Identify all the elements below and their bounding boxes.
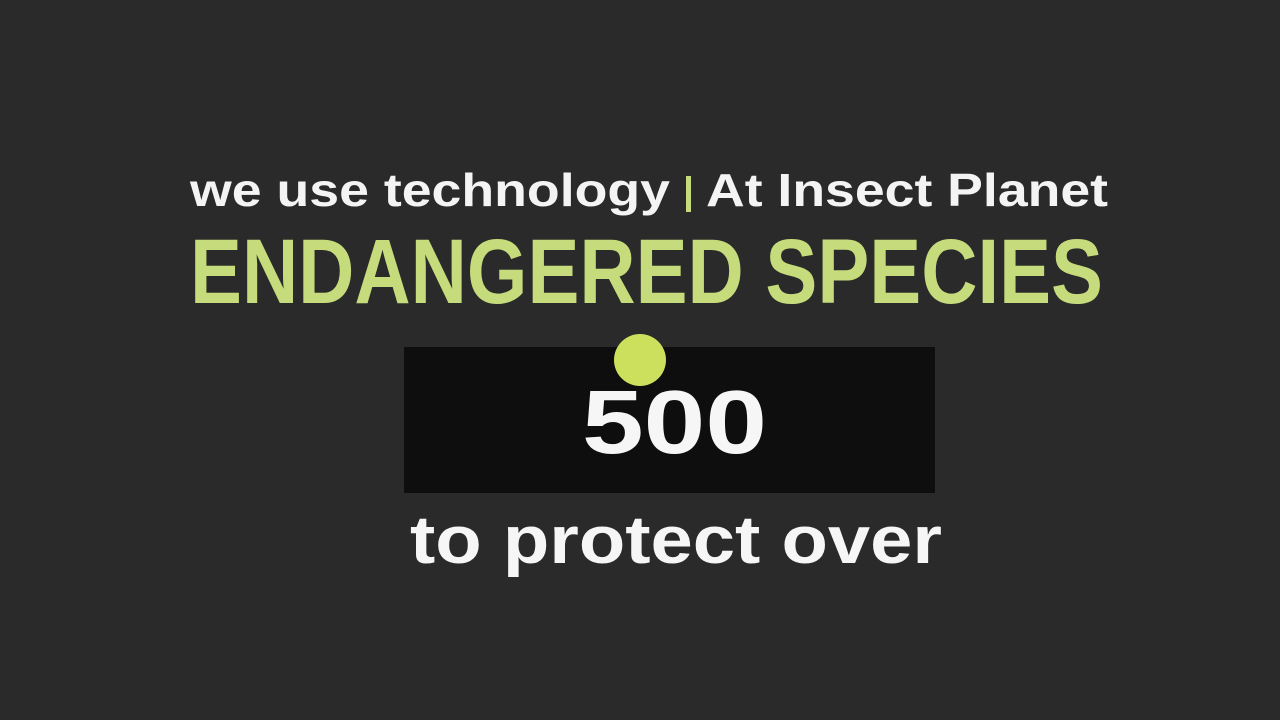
subtitle line: we use technology <box>189 164 670 216</box>
panel: number box <box>404 334 935 493</box>
subtitle line <box>189 164 1108 216</box>
number: 500 <box>582 373 767 473</box>
subtitle line: At Insect Planet <box>706 164 1108 216</box>
caption: to protect over <box>410 502 942 578</box>
icon: green dot <box>614 334 666 386</box>
title: ENDANGERED SPECIES <box>190 221 1103 323</box>
